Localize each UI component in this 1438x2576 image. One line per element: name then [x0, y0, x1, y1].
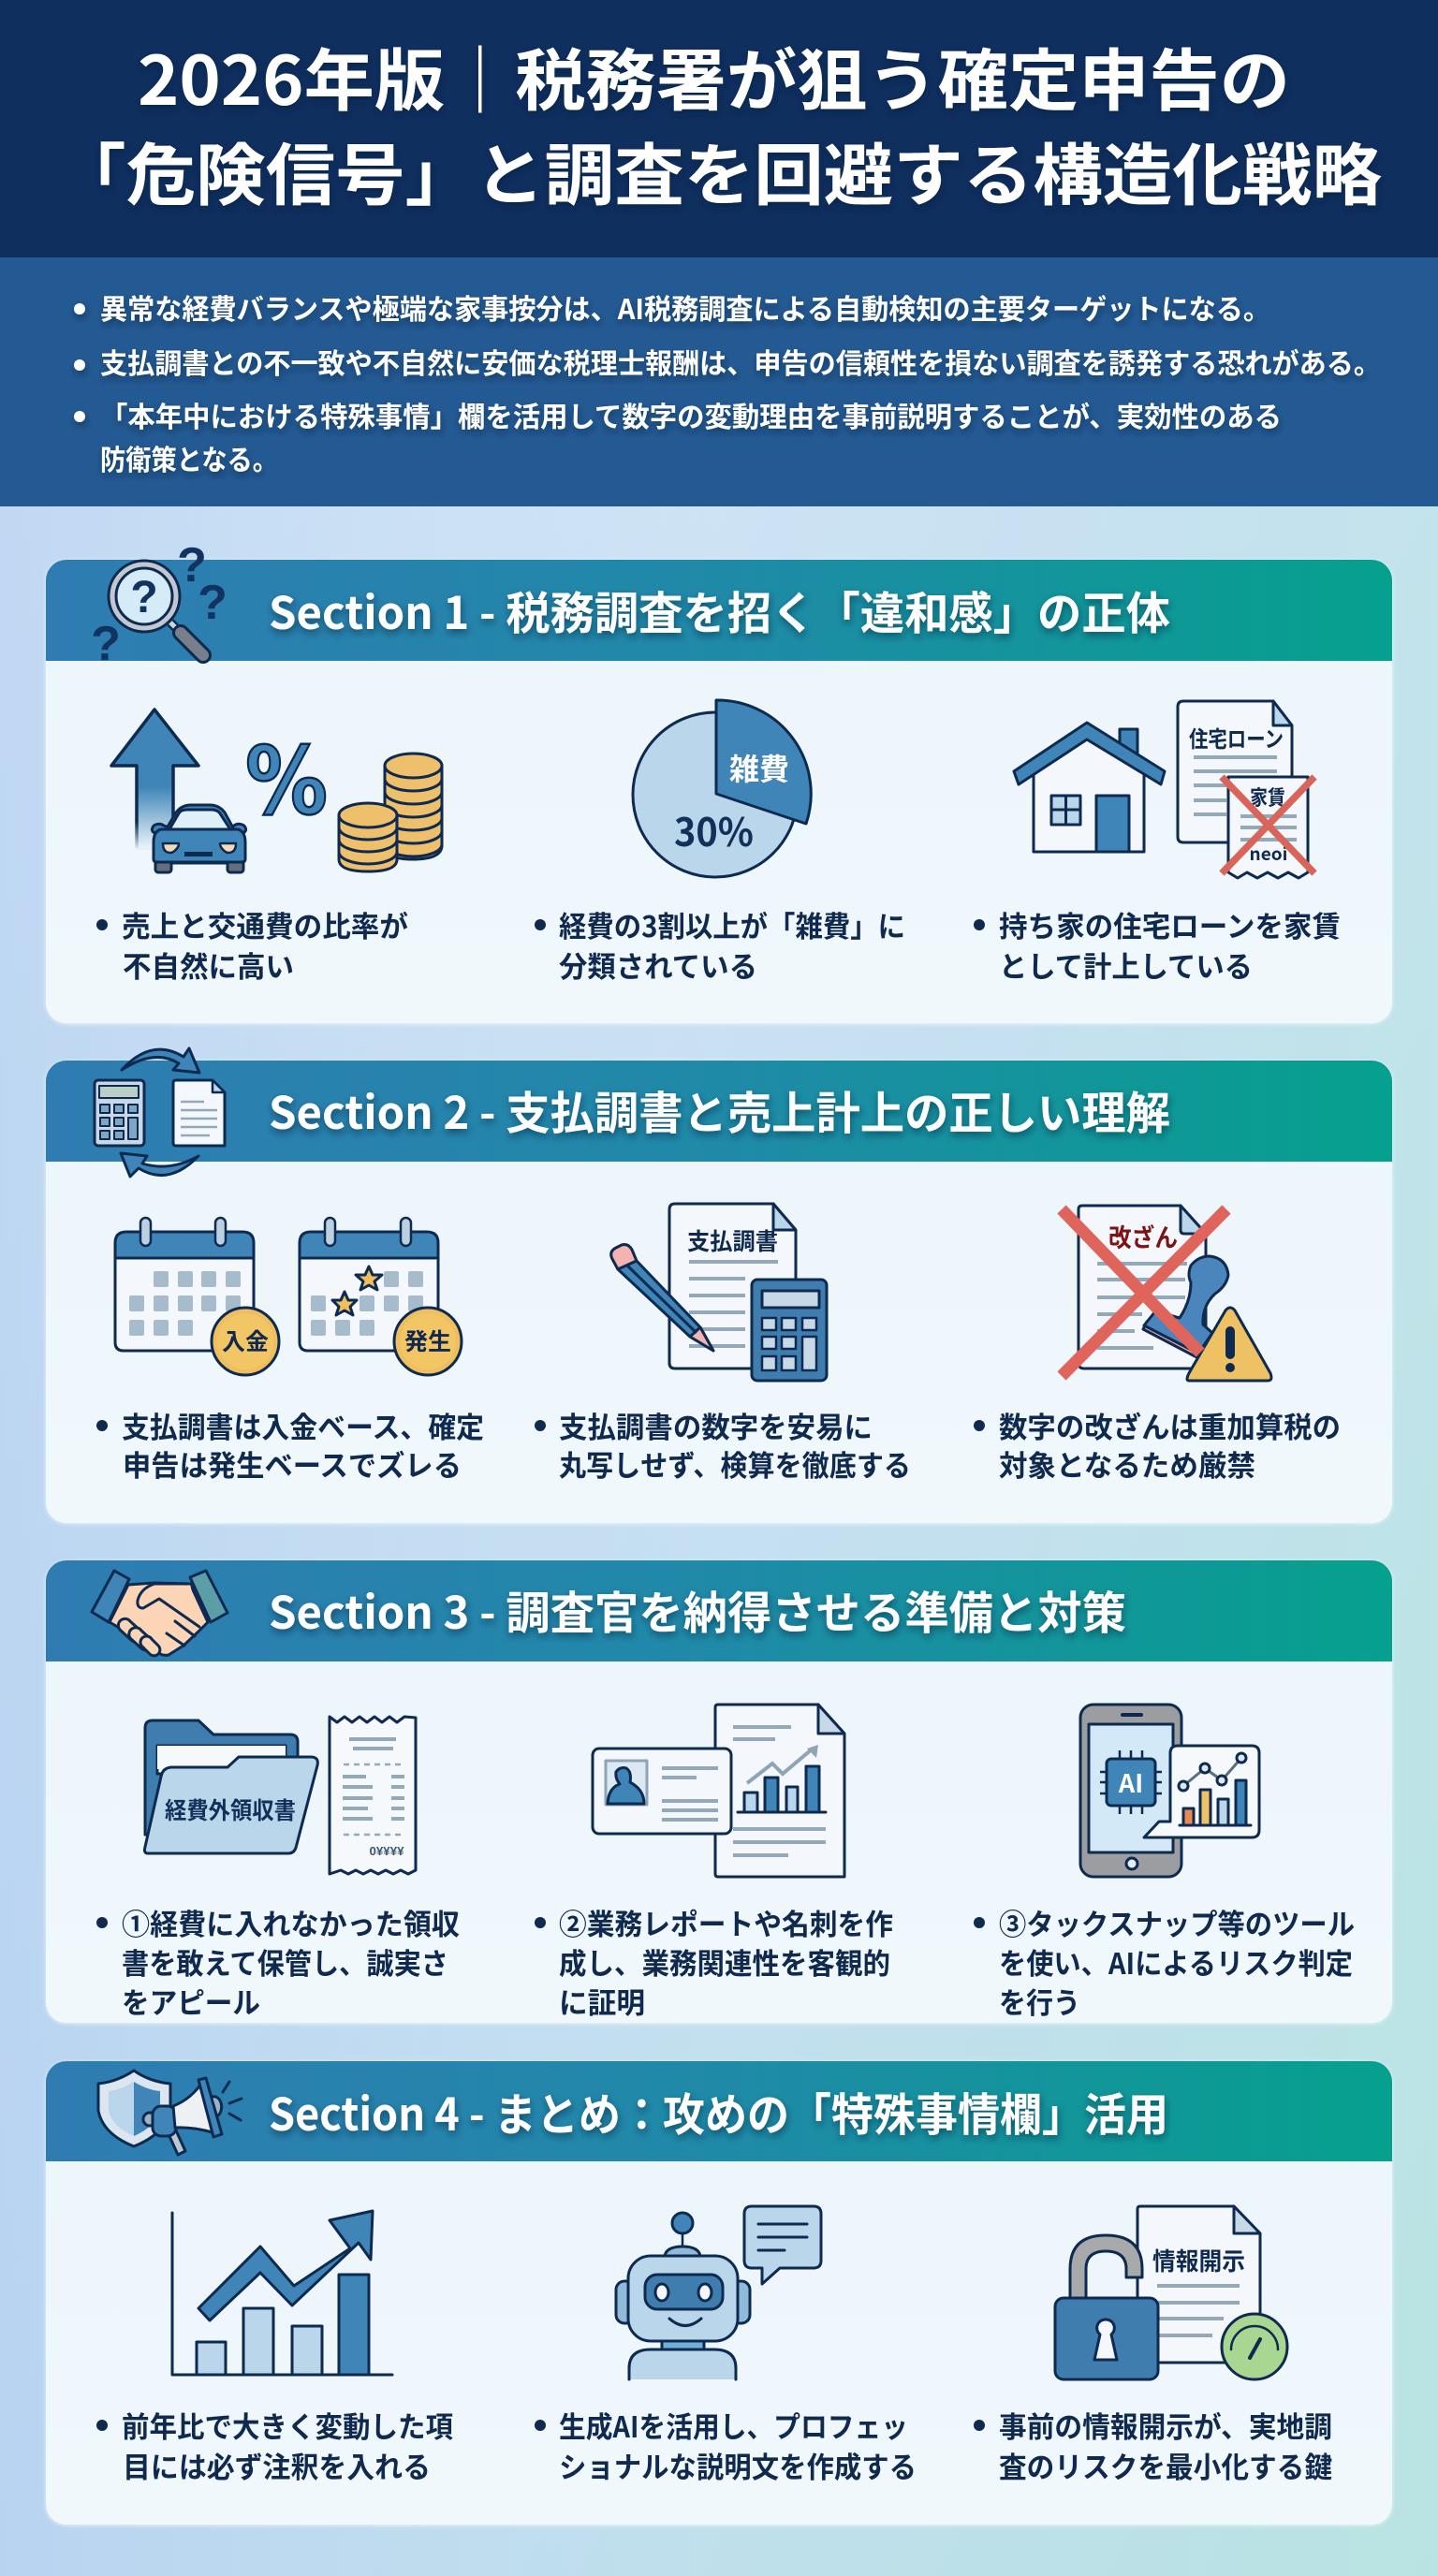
- text: prior disclosure minimizes audit risk: 事前の情報開示が、実地調: [999, 2404, 1332, 2446]
- icon: magnifier with question marks: ?: [91, 617, 121, 671]
- icon: business card and report with chart: [593, 1705, 844, 1877]
- panel: section 1: [46, 538, 1392, 1023]
- summary bullets: 支払調書との不一致や不自然に安価な税理士報酬は、申告の信頼性を損ない調査を誘発する恐れがある。: [100, 341, 1381, 382]
- summary bullets: 防衛策となる。: [100, 437, 278, 478]
- icon: magnifier with question marks: ?: [198, 576, 227, 630]
- text: prior disclosure minimizes audit risk: 査のリスクを最小化する鍵: [999, 2444, 1332, 2486]
- panel: section 2: [46, 1048, 1392, 1523]
- section 2 heading: Section 2 - 支払調書と売上計上の正しい理解: [269, 1076, 1170, 1142]
- icon: payment record, pencil and calculator: [611, 1204, 827, 1381]
- icon: folder and receipt: 経費外領収書: [165, 1793, 296, 1826]
- text: verify payment record figures: [535, 1404, 911, 1485]
- text: home loan counted as rent: 持ち家の住宅ローンを家賃: [999, 903, 1341, 945]
- text: miscellaneous expense share: 分類されている: [559, 944, 757, 986]
- icon: handshake: [92, 1571, 227, 1656]
- icon: rising arrow, car, percent and coins: %: [245, 726, 328, 836]
- text: generate explanations with AI: [535, 2404, 917, 2486]
- text: home loan counted as rent: [974, 903, 1341, 986]
- text: business report evidence: に証明: [559, 1980, 645, 2022]
- section 2 header bar: [46, 1061, 1392, 1162]
- text: business report evidence: ②業務レポートや名刺を作: [559, 1901, 893, 1943]
- icon: robot with speech bubble: [616, 2206, 821, 2379]
- icon: calendars with deposit and accrual badges: 発生: [404, 1324, 451, 1357]
- text: prior disclosure minimizes audit risk: [974, 2404, 1332, 2486]
- text: sales and transport ratio: 売上と交通費の比率が: [122, 903, 408, 945]
- text: annotate large year-on-year changes: 前年比で大きく変動した項: [122, 2404, 453, 2446]
- text: falsification penalty warning: 数字の改ざんは重加算税の: [999, 1404, 1341, 1446]
- icon: folder and receipt: 0¥¥¥¥: [369, 1844, 404, 1858]
- icon: crossed-out falsified document, stamp and warning: 改ざん: [1108, 1218, 1178, 1254]
- icon: shield and megaphone: [98, 2071, 242, 2155]
- summary banner: [0, 257, 1438, 506]
- section 1 heading: Section 1 - 税務調査を招く「違和感」の正体: [269, 577, 1170, 642]
- text: generate explanations with AI: 生成AIを活用し、プロフェッ: [559, 2404, 908, 2446]
- icon: house, loan document and crossed-out rent receipt: 家賃: [1250, 782, 1285, 812]
- text: falsification penalty warning: 対象となるため厳禁: [999, 1442, 1255, 1485]
- icon: payment record, pencil and calculator: 支払調書: [687, 1223, 778, 1257]
- text: miscellaneous expense share: [535, 903, 905, 986]
- text: keep excluded receipts: [96, 1901, 460, 2022]
- icon: open padlock, disclosure document and gauge: 情報開示: [1152, 2243, 1245, 2277]
- text: sales and transport ratio: [96, 903, 408, 986]
- summary bullets: [74, 286, 1381, 478]
- text: verify payment record figures: 丸写しせず、検算を徹底する: [559, 1442, 911, 1485]
- section 3 heading: Section 3 - 調査官を納得させる準備と対策: [269, 1576, 1126, 1642]
- icon: house, loan document and crossed-out rent receipt: [1014, 701, 1314, 878]
- icon: pie chart 30 percent: 雑費: [729, 746, 789, 789]
- text: AI risk assessment tools: [974, 1901, 1355, 2022]
- icon: calendars with deposit and accrual badges: [115, 1218, 462, 1375]
- text: AI risk assessment tools: ③タックスナップ等のツール: [999, 1901, 1355, 1943]
- text: cash basis versus accrual basis: 支払調書は入金ベース、確定: [122, 1404, 484, 1446]
- section 4 header bar: [46, 2061, 1392, 2161]
- icon: magnifier with question marks: [91, 538, 227, 671]
- section 1 header bar: [46, 560, 1392, 661]
- text: business report evidence: 成し、業務関連性を客観的: [559, 1940, 890, 1983]
- icon: pie chart 30 percent: [633, 700, 811, 877]
- text: verify payment record figures: 支払調書の数字を安易に: [559, 1404, 873, 1446]
- text: sales and transport ratio: 不自然に高い: [123, 944, 294, 986]
- text: keep excluded receipts: 書を敢えて保管し、誠実さ: [122, 1940, 448, 1983]
- icon: calculator and document with cycle arrows: [95, 1048, 225, 1177]
- summary bullets: 「本年中における特殊事情」欄を活用して数字の変動理由を事前説明することが、実効性のある: [100, 394, 1282, 435]
- icon: house, loan document and crossed-out rent receipt: neoi: [1250, 841, 1287, 866]
- icon: calendars with deposit and accrual badges: 入金: [222, 1324, 269, 1357]
- panel: section 4: [46, 2061, 1392, 2525]
- icon: house, loan document and crossed-out rent receipt: 住宅ローン: [1189, 721, 1284, 754]
- text: annotate large year-on-year changes: [96, 2404, 453, 2486]
- text: generate explanations with AI: ショナルな説明文を作成する: [559, 2444, 917, 2486]
- title: 2026年版｜税務署が狙う確定申告の: [138, 26, 1290, 124]
- title banner: [0, 0, 1438, 257]
- text: keep excluded receipts: ①経費に入れなかった領収: [122, 1901, 460, 1943]
- text: cash basis versus accrual basis: [96, 1404, 484, 1485]
- text: business report evidence: [535, 1901, 893, 2022]
- text: annotate large year-on-year changes: 目には必ず注釈を入れる: [123, 2444, 431, 2486]
- icon: crossed-out falsified document, stamp and warning: [1062, 1206, 1271, 1381]
- icon: smartphone with AI chip and chart bubble: [1080, 1705, 1259, 1877]
- icon: pie chart 30 percent: 30%: [674, 801, 754, 858]
- text: AI risk assessment tools: を行う: [999, 1980, 1080, 2022]
- panel: section 3: [46, 1560, 1392, 2023]
- text: miscellaneous expense share: 経費の3割以上が「雑費」に: [559, 903, 905, 945]
- text: AI risk assessment tools: を使い、AIによるリスク判定: [999, 1940, 1353, 1983]
- icon: folder and receipt: [144, 1717, 416, 1874]
- icon: open padlock, disclosure document and gauge: [1055, 2206, 1287, 2379]
- text: falsification penalty warning: [974, 1404, 1341, 1485]
- icon: growth bar chart with rising arrow: [172, 2211, 392, 2375]
- section 3 header bar: [46, 1560, 1392, 1661]
- text: home loan counted as rent: として計上している: [999, 944, 1253, 986]
- section 4 heading: Section 4 - まとめ：攻めの「特殊事情欄」活用: [269, 2078, 1168, 2144]
- summary bullets: 異常な経費バランスや極端な家事按分は、AI税務調査による自動検知の主要ターゲットになる。: [100, 286, 1270, 328]
- icon: magnifier with question marks: ?: [177, 538, 207, 593]
- title: [56, 26, 1382, 219]
- icon: magnifier with question marks: ?: [130, 573, 158, 622]
- text: keep excluded receipts: をアピール: [122, 1980, 260, 2022]
- title: 「危険信号」と調査を回避する構造化戦略: [56, 121, 1382, 219]
- icon: rising arrow, car, percent and coins: [111, 710, 442, 872]
- text: cash basis versus accrual basis: 申告は発生ベースでズレる: [123, 1442, 462, 1485]
- icon: smartphone with AI chip and chart bubble: AI: [1118, 1764, 1143, 1800]
